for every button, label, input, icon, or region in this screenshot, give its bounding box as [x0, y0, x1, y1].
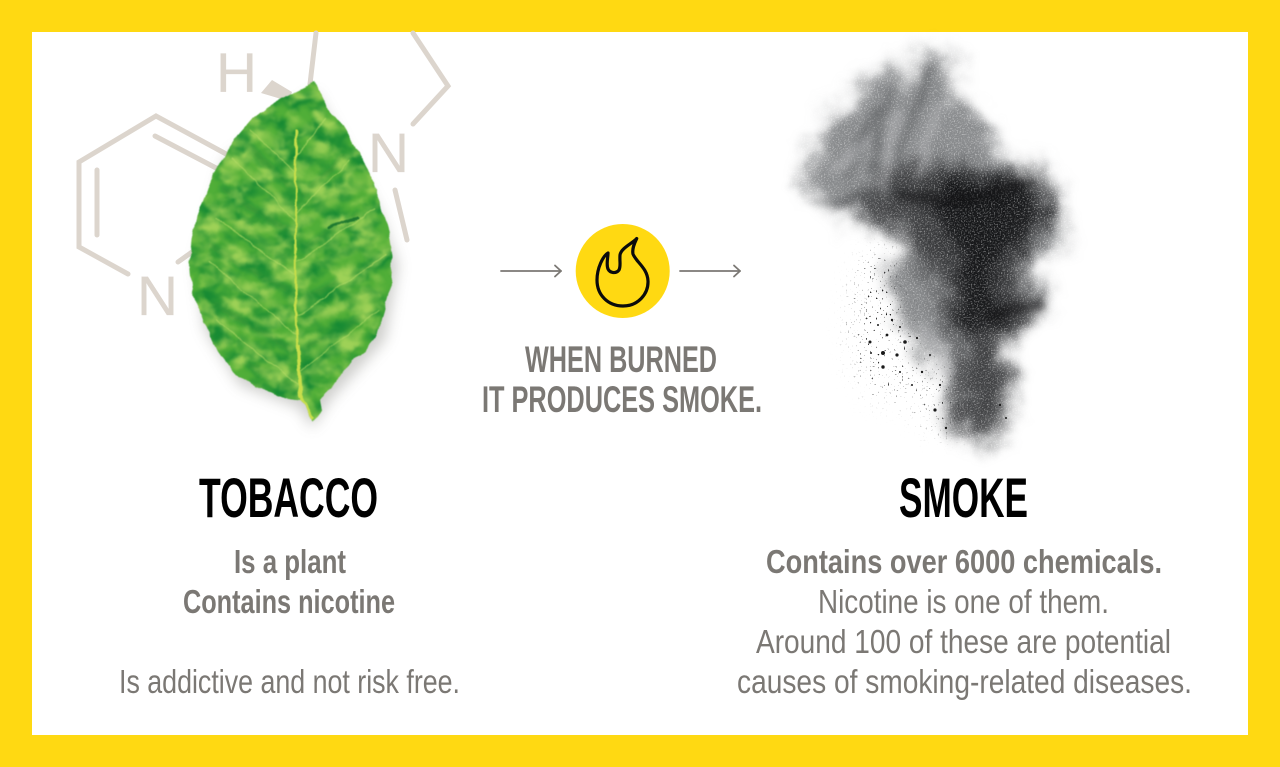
text: around 100: Around 100 of these are potential — [756, 624, 1171, 661]
smoke particles — [868, 319, 1007, 429]
caption: when burned: WHEN BURNED — [525, 339, 717, 380]
text: causes: causes of smoking-related diseases. — [737, 664, 1192, 701]
caption: when burned — [482, 339, 762, 420]
icon: smoke cloud — [805, 50, 1066, 442]
panel: smoke text — [737, 466, 1192, 701]
leaf shadow — [196, 92, 398, 428]
icon: nicotine molecule diagram: N — [368, 121, 409, 184]
arrow: out of flame — [680, 266, 740, 276]
icon: nicotine molecule diagram: H — [216, 41, 257, 104]
panel: tobacco text — [119, 466, 460, 701]
heading: tobacco: TOBACCO — [199, 466, 378, 529]
text: nicotine is one: Nicotine is one of them. — [818, 584, 1109, 621]
arrow: into flame — [501, 266, 561, 276]
text: addictive: Is addictive and not risk free. — [119, 664, 460, 701]
icon: flame in yellow circle — [576, 224, 670, 318]
caption: when burned: IT PRODUCES SMOKE. — [482, 379, 762, 420]
icon: green tobacco leaf — [188, 80, 394, 422]
text: chemicals: Contains over 6000 chemicals. — [766, 544, 1162, 581]
heading: smoke: SMOKE — [899, 466, 1028, 529]
text: is a plant: Is a plant — [234, 544, 346, 581]
text: contains nicotine: Contains nicotine — [183, 584, 395, 621]
icon: nicotine molecule diagram: N — [137, 264, 178, 327]
icon: nicotine molecule diagram — [79, 33, 448, 327]
